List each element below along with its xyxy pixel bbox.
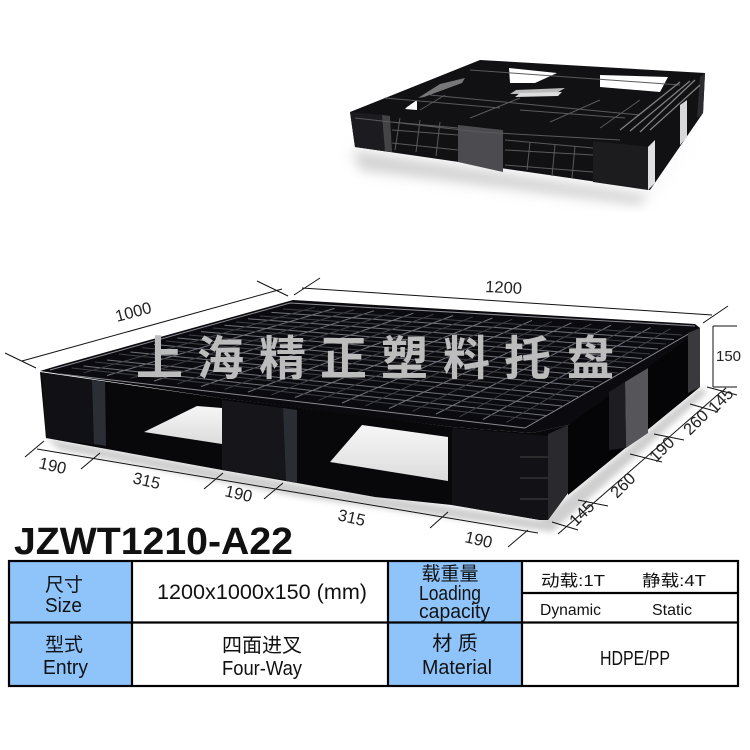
dimension labels: 190 bbox=[646, 434, 678, 466]
cell text: Static bbox=[652, 602, 692, 619]
front legs bbox=[42, 373, 106, 446]
cell text: Loading bbox=[419, 583, 481, 605]
dimension labels: 1200 bbox=[485, 278, 522, 298]
cell text: Four-Way bbox=[222, 658, 302, 680]
small pallet photo bbox=[350, 60, 705, 205]
dimension labels bbox=[37, 278, 741, 552]
dimension labels: 190 bbox=[223, 482, 254, 506]
spec table bbox=[9, 560, 738, 686]
dimension labels: 315 bbox=[131, 469, 162, 493]
dimension labels: 260 bbox=[607, 470, 639, 502]
dimension labels: 190 bbox=[463, 528, 494, 552]
dimension labels: 315 bbox=[336, 506, 367, 530]
cell text: 静载:4T bbox=[642, 572, 706, 590]
cell text: capacity bbox=[419, 601, 490, 623]
right face bbox=[568, 330, 700, 495]
main pallet bbox=[40, 300, 700, 520]
dimension labels: 260 bbox=[680, 407, 712, 439]
watermark: 上海精正塑料托盘 bbox=[136, 320, 614, 389]
cell text: HDPE/PP bbox=[600, 648, 670, 670]
cell text: 动载:1T bbox=[541, 572, 605, 590]
front opening 1 bbox=[144, 406, 222, 444]
dimension labels: 1000 bbox=[113, 299, 154, 326]
cell text: 材 质 bbox=[432, 632, 478, 655]
dimension labels: 150 bbox=[716, 348, 741, 365]
cell text: Entry bbox=[43, 657, 88, 679]
dimension labels: 190 bbox=[37, 454, 68, 478]
top deck bbox=[40, 300, 700, 433]
cell text: 1200x1000x150 (mm) bbox=[157, 581, 367, 604]
cell text: Material bbox=[422, 657, 492, 679]
cell text: 型式 bbox=[45, 634, 83, 656]
cell text: Size bbox=[45, 595, 82, 617]
front opening 2 bbox=[330, 425, 448, 481]
title: JZWT1210-A22 bbox=[14, 521, 293, 563]
cell text bbox=[43, 563, 706, 680]
dimension labels: 145 bbox=[705, 385, 737, 417]
cell text: 四面进叉 bbox=[222, 634, 302, 657]
floor shadow under main pallet bbox=[46, 388, 708, 532]
front face bbox=[40, 372, 568, 520]
cell text: 尺寸 bbox=[45, 574, 83, 596]
cell text: Dynamic bbox=[540, 602, 601, 619]
dimension labels: 145 bbox=[566, 498, 598, 530]
grid bbox=[9, 561, 738, 686]
dimension lines bbox=[5, 278, 737, 547]
deck grid bbox=[50, 303, 695, 428]
header cells bbox=[9, 560, 522, 686]
cell text: 载重量 bbox=[421, 563, 479, 585]
